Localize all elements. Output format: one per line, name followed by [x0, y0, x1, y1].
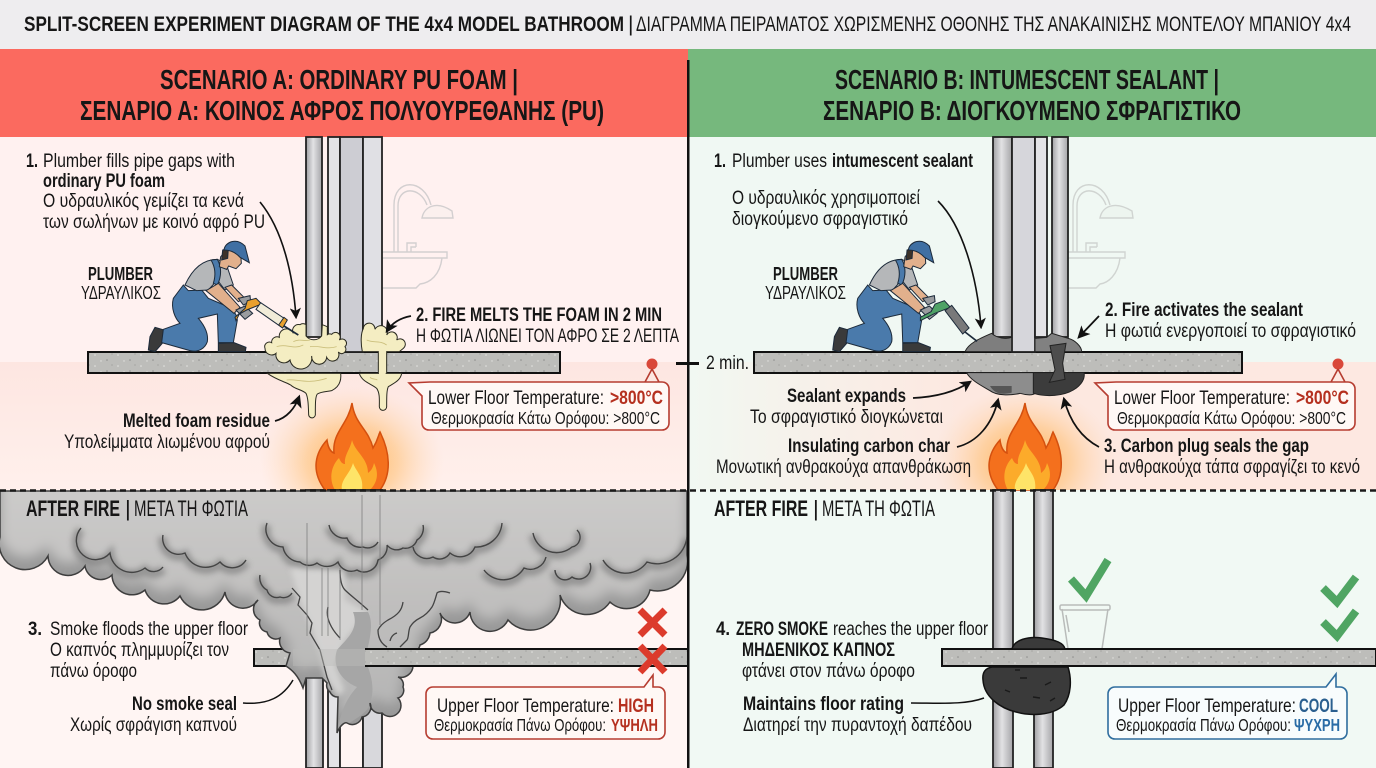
text: plumber label B: PLUMBER	[773, 264, 838, 284]
arrow: sealant expands	[913, 382, 970, 398]
heading: scenario A: SCENARIO A: ORDINARY PU FOAM |	[160, 64, 518, 95]
text: sealant expands	[750, 385, 943, 428]
floor slab: after fire scenario B	[942, 649, 1376, 666]
arrow: step 2 to foam	[387, 316, 411, 331]
text: melted foam residue	[64, 410, 270, 453]
callout: upper floor temperature A	[426, 675, 665, 739]
text: melted foam residue: Υπολείμματα λιωμένου αφρού	[64, 431, 270, 453]
callout: upper floor temperature B	[1108, 674, 1347, 739]
heading: after fire B: |	[813, 496, 819, 521]
text: step 2 scenario A: 2. FIRE MELTS THE FOAM IN 2 MIN	[416, 304, 662, 326]
pipes: scenario A upper section	[306, 137, 382, 352]
text: step 4 zero smoke: reaches the upper floor	[833, 618, 988, 640]
panel: scenario B background	[688, 137, 1376, 768]
leader: no smoke seal	[243, 680, 293, 703]
icon: fire left	[316, 403, 388, 490]
text: step 2 scenario A	[416, 304, 679, 347]
text: insulating carbon char: Μονωτική ανθρακούχα απανθράκωση	[716, 456, 971, 478]
text: step 2 scenario B	[1105, 299, 1356, 342]
text: 2 minute marker	[676, 352, 749, 374]
text: no smoke seal: No smoke seal	[132, 693, 237, 715]
text: insulating carbon char: Insulating carbon char	[788, 435, 950, 457]
text: plumber label A: ΥΔΡΑΥΛΙΚΟΣ	[81, 283, 161, 303]
heading: scenario B: SCENARIO B: INTUMESCENT SEALANT |	[835, 64, 1219, 95]
callout: lower floor temperature B: >800°C	[1296, 387, 1349, 409]
text: sealant expands: Το σφραγιστικό διογκώνεται	[750, 406, 943, 428]
heading: scenario A: ΣΕΝΑΡΙΟ Α: ΚΟΙΝΟΣ ΑΦΡΟΣ ΠΟΛΥΟΥΡΕΘΑΝΗΣ (PU)	[80, 95, 604, 126]
callout: upper floor temperature B: Θερμοκρασία Πάνω Ορόφου:	[1116, 715, 1291, 735]
icon: green check top	[1071, 560, 1108, 596]
arrow: carbon char	[957, 400, 998, 447]
callout: upper floor temperature A: HIGH	[618, 695, 654, 717]
text: step 3 smoke floods	[28, 618, 248, 682]
text: step 4 zero smoke	[716, 618, 988, 682]
text: step 4 zero smoke: ΜΗΔΕΝΙΚΟΣ ΚΑΠΝΟΣ	[742, 639, 895, 661]
heading: scenario A	[0, 49, 688, 137]
arrow: residue	[275, 397, 299, 421]
callout: upper floor temperature A: Upper Floor Temperature:	[437, 695, 614, 717]
leader: floor rating	[911, 698, 984, 703]
text: maintains floor rating: Maintains floor rating	[743, 693, 904, 715]
text: step 4 zero smoke: φτάνει στον πάνω όροφο	[742, 660, 915, 682]
icon: empty cup	[1060, 605, 1110, 649]
text: carbon plug: 3. Carbon plug seals the gap	[1104, 435, 1309, 457]
heading: after fire A	[26, 496, 248, 521]
callout: upper floor temperature A: ΥΨΗΛΗ	[611, 715, 658, 735]
floor showing through the smoke	[293, 649, 420, 666]
text: maintains floor rating: Διατηρεί την πυραντοχή δαπέδου	[743, 714, 972, 736]
heading: scenario B	[688, 49, 1376, 137]
text: carbon plug	[1104, 435, 1360, 478]
heading: after fire B	[714, 496, 935, 521]
callout: lower floor temperature B: Lower Floor Temperature:	[1114, 387, 1290, 409]
text: step 4 zero smoke: ZERO SMOKE	[736, 618, 828, 640]
floor slab: scenario B lower level	[754, 352, 1242, 373]
callout: upper floor temperature B: Upper Floor Temperature:	[1118, 695, 1296, 717]
text: step 1 scenario A: των σωλήνων με κοινό αφρό PU	[43, 211, 265, 233]
arrow: step 2 B	[1079, 316, 1099, 337]
text: step 1 scenario B	[714, 150, 973, 230]
text: sealant expands: Sealant expands	[787, 385, 906, 407]
fire glow left	[270, 395, 434, 490]
sealant: intumescent sealant expanded around pipes	[965, 333, 1084, 396]
icon: green check middle	[1323, 577, 1356, 602]
title bar: SPLIT-SCREEN EXPERIMENT DIAGRAM OF THE 4x4 MODEL BATHROOM	[24, 13, 624, 36]
fire glow right	[944, 395, 1106, 490]
floor slab: scenario A lower level	[88, 352, 560, 373]
callout: lower floor temperature A: >800°C	[610, 387, 663, 409]
arrow: step 1 to foam	[260, 202, 296, 317]
arrow: step 1 B to sealant	[938, 201, 981, 327]
faint pipes visible through smoke	[307, 495, 380, 640]
callout: upper floor temperature B: ΨΥΧΡΗ	[1294, 715, 1340, 735]
carbon plug through the slab	[983, 637, 1070, 714]
text: maintains floor rating	[743, 693, 972, 736]
heading: scenario B: ΣΕΝΑΡΙΟ Β: ΔΙΟΓΚΟΥΜΕΝΟ ΣΦΡΑΓΙΣΤΙΚΟ	[823, 95, 1241, 126]
heading: after fire A: |	[125, 496, 131, 521]
foam: melted PU above and below the slab	[265, 323, 405, 418]
icon: fire right	[989, 403, 1061, 490]
pipes: after fire scenario B	[993, 490, 1053, 768]
icon: red cross bottom	[640, 646, 665, 672]
text: step 2 scenario A: Η ΦΩΤΙΑ ΛΙΩΝΕΙ ΤΟΝ ΑΦΡΟ ΣΕ 2 ΛΕΠΤΑ	[416, 325, 679, 347]
text: step 3 smoke floods: Ο καπνός πλημμυρίζει τον	[50, 639, 229, 661]
text: step 2 scenario B: 2. Fire activates the sealant	[1105, 299, 1303, 321]
icon: green check bottom	[1323, 611, 1356, 636]
heading: after fire A: AFTER FIRE	[26, 496, 120, 521]
callout: upper floor temperature B: COOL	[1299, 695, 1338, 717]
text: step 1 scenario B: διογκούμενο σφραγιστικό	[732, 208, 908, 230]
text: step 1 scenario B: intumescent sealant	[832, 150, 973, 172]
heading: after fire B: AFTER FIRE	[714, 496, 808, 521]
text: insulating carbon char	[716, 435, 971, 478]
callout: lower floor temperature A	[409, 358, 669, 430]
text: step 3 smoke floods: πάνω όροφο	[50, 660, 137, 682]
smoke cloud: fills upper floor and pours through the slab	[0, 479, 688, 733]
callout: lower floor temperature A: Lower Floor Temperature:	[428, 387, 604, 409]
text: step 3 smoke floods: 3.	[28, 618, 42, 640]
text: step 1 scenario A: ordinary PU foam	[43, 170, 165, 192]
centre divider between scenarios	[687, 60, 690, 768]
text: step 3 smoke floods: Smoke floods the upper floor	[50, 618, 248, 640]
title bar	[0, 0, 1376, 49]
text: step 1 scenario A: Ο υδραυλικός γεμίζει τα κενά	[43, 190, 244, 212]
icon: plumber left	[148, 241, 298, 352]
text: 2 minute marker: 2 min.	[706, 352, 749, 374]
text: plumber label B: ΥΔΡΑΥΛΙΚΟΣ	[765, 283, 846, 303]
panel: scenario A background	[0, 137, 688, 768]
callout: lower floor temperature B	[1095, 358, 1355, 430]
icon: faint bathroom right	[1068, 185, 1133, 288]
callout: upper floor temperature A: Θερμοκρασία Πάνω Ορόφου:	[434, 715, 606, 735]
pipes: scenario B upper section	[993, 137, 1068, 352]
text: step 4 zero smoke: 4.	[716, 618, 730, 640]
icon: red cross top	[640, 610, 665, 635]
text: step 1 scenario B: 1.	[714, 150, 726, 172]
arrow: carbon plug	[1064, 399, 1099, 447]
text: step 1 scenario A: Plumber fills pipe gaps with	[43, 150, 235, 172]
floor slab: after fire scenario A	[254, 649, 688, 666]
text: step 1 scenario B: Ο υδραυλικός χρησιμοποιεί	[732, 187, 921, 209]
icon: plumber right	[833, 241, 977, 352]
text: no smoke seal: Χωρίς σφράγιση καπνού	[70, 714, 237, 736]
text: plumber label B	[765, 264, 846, 303]
heading: after fire A: ΜΕΤΑ ΤΗ ΦΩΤΙΑ	[134, 496, 248, 521]
text: step 1 scenario A: 1.	[26, 150, 38, 172]
callout: lower floor temperature A: Θερμοκρασία Κάτω Ορόφου: >800°C	[431, 408, 660, 428]
text: no smoke seal	[70, 693, 237, 736]
text: step 1 scenario A	[26, 150, 265, 233]
pipes: after fire scenario A	[306, 490, 382, 768]
icon: faint bathroom left	[382, 185, 453, 288]
text: step 1 scenario B: Plumber uses	[732, 150, 827, 172]
title bar: |	[628, 13, 633, 36]
text: melted foam residue: Melted foam residue	[123, 410, 270, 432]
heading: after fire B: ΜΕΤΑ ΤΗ ΦΩΤΙΑ	[822, 496, 935, 521]
text: plumber label A	[81, 264, 161, 303]
dashed divider: before / after	[0, 489, 1376, 492]
text: plumber label A: PLUMBER	[88, 264, 153, 284]
